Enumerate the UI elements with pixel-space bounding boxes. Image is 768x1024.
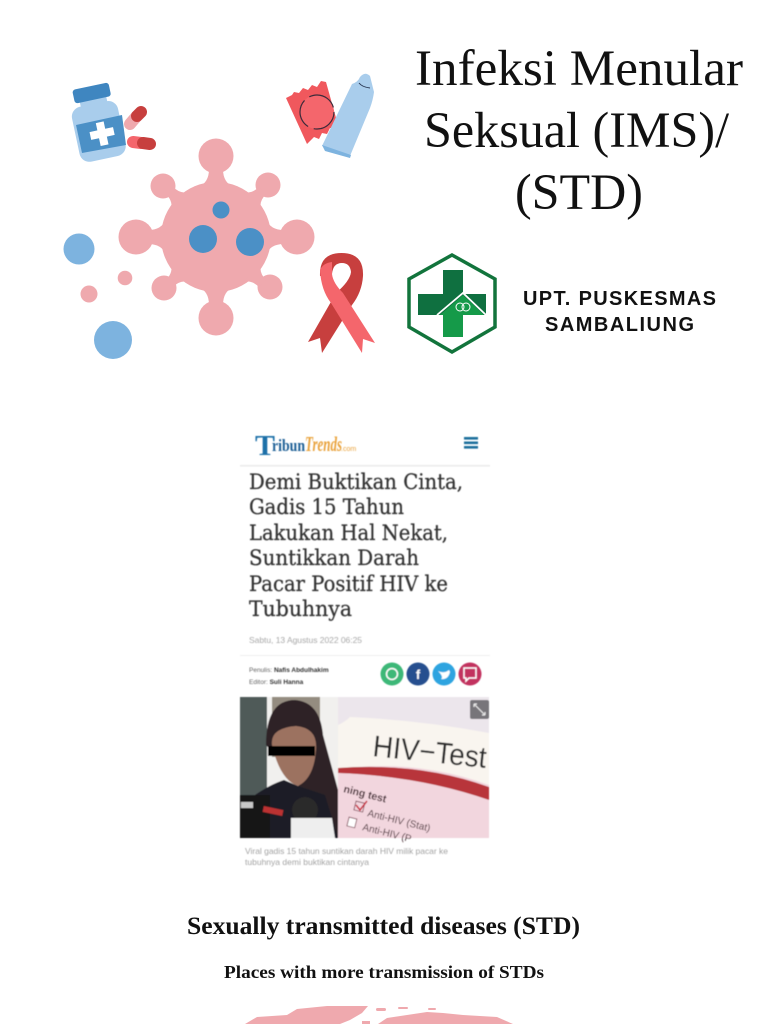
article headline: Suntikkan Darah: [249, 546, 419, 570]
share buttons: [380, 662, 482, 686]
icon: hamburger menu: [464, 437, 478, 449]
article headline: Lakukan Hal Nekat,: [249, 521, 448, 545]
share buttons: f: [416, 667, 421, 682]
icon: floating particles: [64, 234, 132, 359]
world map fragment: [245, 1006, 513, 1024]
subheading: Places with more transmission of STDs: [224, 962, 544, 982]
photo: HIV test form: HIV−Test: [371, 730, 489, 775]
news article screenshot: [240, 430, 490, 867]
article headline: Tubuhnya: [249, 597, 352, 621]
title: (STD): [515, 165, 643, 221]
news site logo: [255, 430, 356, 462]
section heading: Sexually transmitted diseases (STD): [187, 913, 580, 940]
photo: HIV test form: Anti-HIV (P: [361, 822, 413, 845]
article headline: Demi Buktikan Cinta,: [249, 470, 463, 494]
author credits: [249, 667, 329, 686]
icon: expand button: [470, 700, 489, 719]
article headline: [249, 470, 463, 621]
organisation name: UPT. PUSKESMAS: [523, 288, 716, 310]
photo caption: Viral gadis 15 tahun suntikan darah HIV milik pacar ke: [245, 846, 448, 856]
title: Seksual (IMS)/: [424, 103, 730, 159]
article headline: Pacar Positif HIV ke: [249, 572, 448, 596]
organisation name: [523, 288, 716, 336]
article date: Sabtu, 13 Agustus 2022 06:25: [249, 635, 362, 645]
author credits: Editor: Suli Hanna: [249, 679, 304, 686]
news site logo: T: [255, 430, 275, 462]
news site logo: Trends: [305, 432, 342, 456]
author credits: Penulis: Nafis Abdulhakim: [249, 667, 329, 674]
news site logo: ribun: [272, 436, 305, 455]
icon: medicine bottle and pills: [66, 82, 150, 164]
organisation name: SAMBALIUNG: [545, 314, 694, 336]
icon: condom packet and condom: [286, 74, 374, 158]
news site logo: .com: [341, 446, 356, 453]
photo: HIV test form: Anti-HIV (Stat): [366, 808, 431, 835]
photo caption: [245, 846, 448, 867]
photo: girl with microphones: [240, 697, 338, 838]
photo: HIV test form: ning test: [342, 783, 388, 806]
photo: HIV test form: [338, 697, 489, 845]
icon: virus: [118, 138, 314, 336]
title: [415, 41, 743, 221]
photo caption: tubuhnya demi buktikan cintanya: [245, 857, 369, 867]
article headline: Gadis 15 Tahun: [249, 495, 404, 519]
logo: puskesmas: [409, 255, 495, 352]
title: Infeksi Menular: [415, 41, 743, 97]
icon: awareness ribbon: [308, 253, 375, 353]
